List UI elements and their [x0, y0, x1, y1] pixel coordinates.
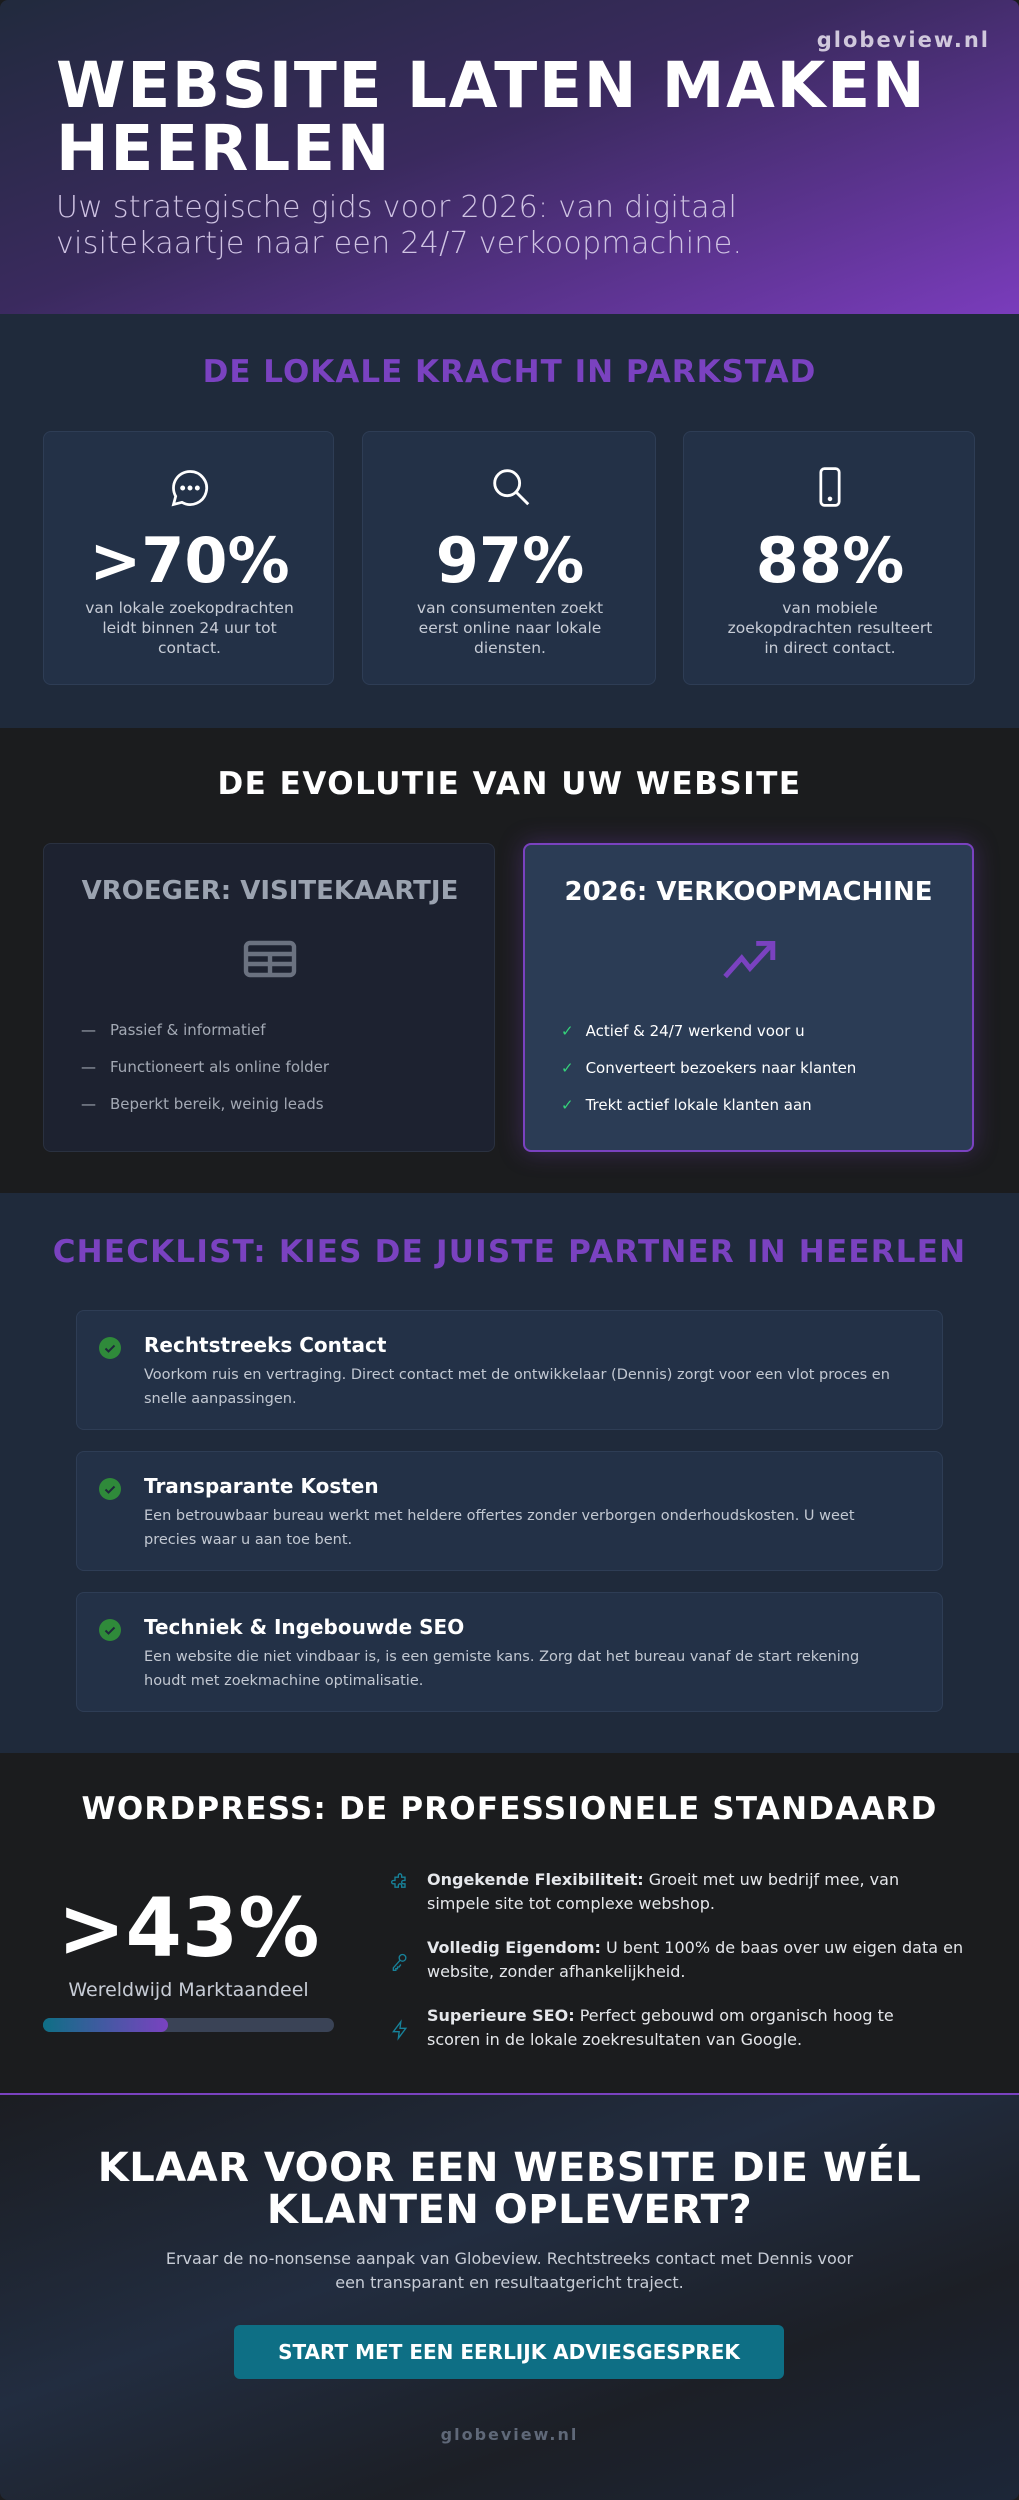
number: >70% [89, 524, 290, 597]
title: Transparante Kosten [144, 1474, 379, 1498]
list: — Beperkt bereik, weinig leads [81, 1095, 324, 1113]
list: — Functioneert als online folder [81, 1058, 329, 1076]
section: evolutie [0, 728, 1019, 1193]
CTA title: KLANTEN OPLEVERT? [267, 2187, 752, 2233]
card: vroeger [43, 843, 495, 1152]
title: WEBSITE LATEN MAKEN [56, 49, 926, 122]
icon: table/card [244, 940, 296, 978]
text: Een betrouwbaar bureau werkt met heldere offertes zonder verborgen onderhoudskosten. U weet precies waar u aan toe bent. [144, 1508, 855, 1548]
stat card 3 [683, 431, 975, 685]
feature 3: Superieure SEO: Perfect gebouwd om organisch hoog te scoren in de lokale zoekresultaten van Google. [427, 2006, 894, 2049]
CTA title [98, 2144, 921, 2233]
icon: check [99, 1478, 121, 1500]
icon: phone [819, 467, 841, 507]
icon: search [493, 469, 530, 506]
number: >43% [58, 1882, 319, 1976]
stat card 1 [43, 431, 334, 685]
list [81, 1021, 330, 1113]
big stat [58, 1882, 319, 2001]
feature 1: Ongekende Flexibiliteit: Groeit met uw bedrijf mee, van simpele site tot complexe webshop. [427, 1870, 899, 1913]
section: lokale kracht [0, 314, 1019, 728]
progress bar [43, 2018, 334, 2032]
number: 97% [436, 524, 584, 597]
subtitle [56, 190, 742, 261]
subtitle: visitekaartje naar een 24/7 verkoopmachine. [56, 226, 742, 261]
brand label: globeview.nl [817, 28, 990, 52]
CTA text: Ervaar de no-nonsense aanpak van Globeview. Rechtstreeks contact met Dennis voor een transparant en resultaatgericht traject. [166, 2249, 853, 2292]
description: van mobiele zoekopdrachten resulteert in direct contact. [728, 599, 932, 657]
card: 2026 [523, 843, 974, 1152]
subtitle: Uw strategische gids voor 2026: van digitaal [56, 190, 737, 225]
list [561, 1022, 856, 1114]
checklist item 1 [76, 1310, 943, 1430]
heading: WORDPRESS: DE PROFESSIONELE STANDAARD [81, 1791, 938, 1827]
card title: VROEGER: VISITEKAARTJE [82, 876, 458, 906]
button [234, 2325, 784, 2379]
list: ✓ Actief & 24/7 werkend voor u [561, 1022, 805, 1040]
button: START MET EEN EERLIJK ADVIESGESPREK [278, 2340, 740, 2364]
feature list [391, 1870, 963, 2049]
title: Rechtstreeks Contact [144, 1333, 386, 1357]
icon: check [99, 1619, 121, 1641]
description: van consumenten zoekt eerst online naar lokale diensten. [417, 599, 603, 657]
header [0, 0, 1019, 314]
list: — Passief & informatief [81, 1021, 266, 1039]
text: Voorkom ruis en vertraging. Direct contact met de ontwikkelaar (Dennis) zorgt voor een vlot proces en snelle aanpassingen. [144, 1367, 890, 1407]
description: van lokale zoekopdrachten leidt binnen 24 uur tot contact. [85, 599, 294, 657]
label: Wereldwijd Marktaandeel [68, 1979, 309, 2001]
list: ✓ Trekt actief lokale klanten aan [561, 1096, 812, 1114]
icon: bolt [392, 2019, 407, 2040]
title: HEERLEN [56, 112, 391, 185]
heading: DE LOKALE KRACHT IN PARKSTAD [203, 354, 816, 390]
feature 2: Volledig Eigendom: U bent 100% de baas over uw eigen data en website, zonder afhankelijkheid. [427, 1938, 963, 1981]
card title: 2026: VERKOOPMACHINE [564, 877, 932, 907]
list: ✓ Converteert bezoekers naar klanten [561, 1059, 856, 1077]
icon: puzzle [391, 1873, 406, 1888]
heading: CHECKLIST: KIES DE JUISTE PARTNER IN HEERLEN [53, 1234, 966, 1270]
title: Techniek & Ingebouwde SEO [144, 1615, 464, 1639]
icon: chat bubble [172, 470, 208, 506]
number: 88% [756, 524, 904, 597]
section: wordpress [0, 1753, 1019, 2093]
icon: trending up [723, 941, 776, 978]
checklist item 3 [76, 1592, 943, 1712]
CTA title: KLAAR VOOR EEN WEBSITE DIE WÉL [98, 2145, 921, 2191]
section: checklist [0, 1193, 1019, 1753]
text: Een website die niet vindbaar is, is een gemiste kans. Zorg dat het bureau vanaf de start rekening houdt met zoekmachine optimalisatie. [144, 1649, 859, 1689]
section: CTA [0, 2093, 1019, 2500]
footer brand: globeview.nl [441, 2425, 578, 2444]
checklist item 2 [76, 1451, 943, 1571]
heading: DE EVOLUTIE VAN UW WEBSITE [217, 766, 802, 802]
stat card 2 [362, 431, 656, 685]
icon: check [99, 1337, 121, 1359]
title [56, 49, 926, 185]
icon: key [392, 1954, 406, 1971]
